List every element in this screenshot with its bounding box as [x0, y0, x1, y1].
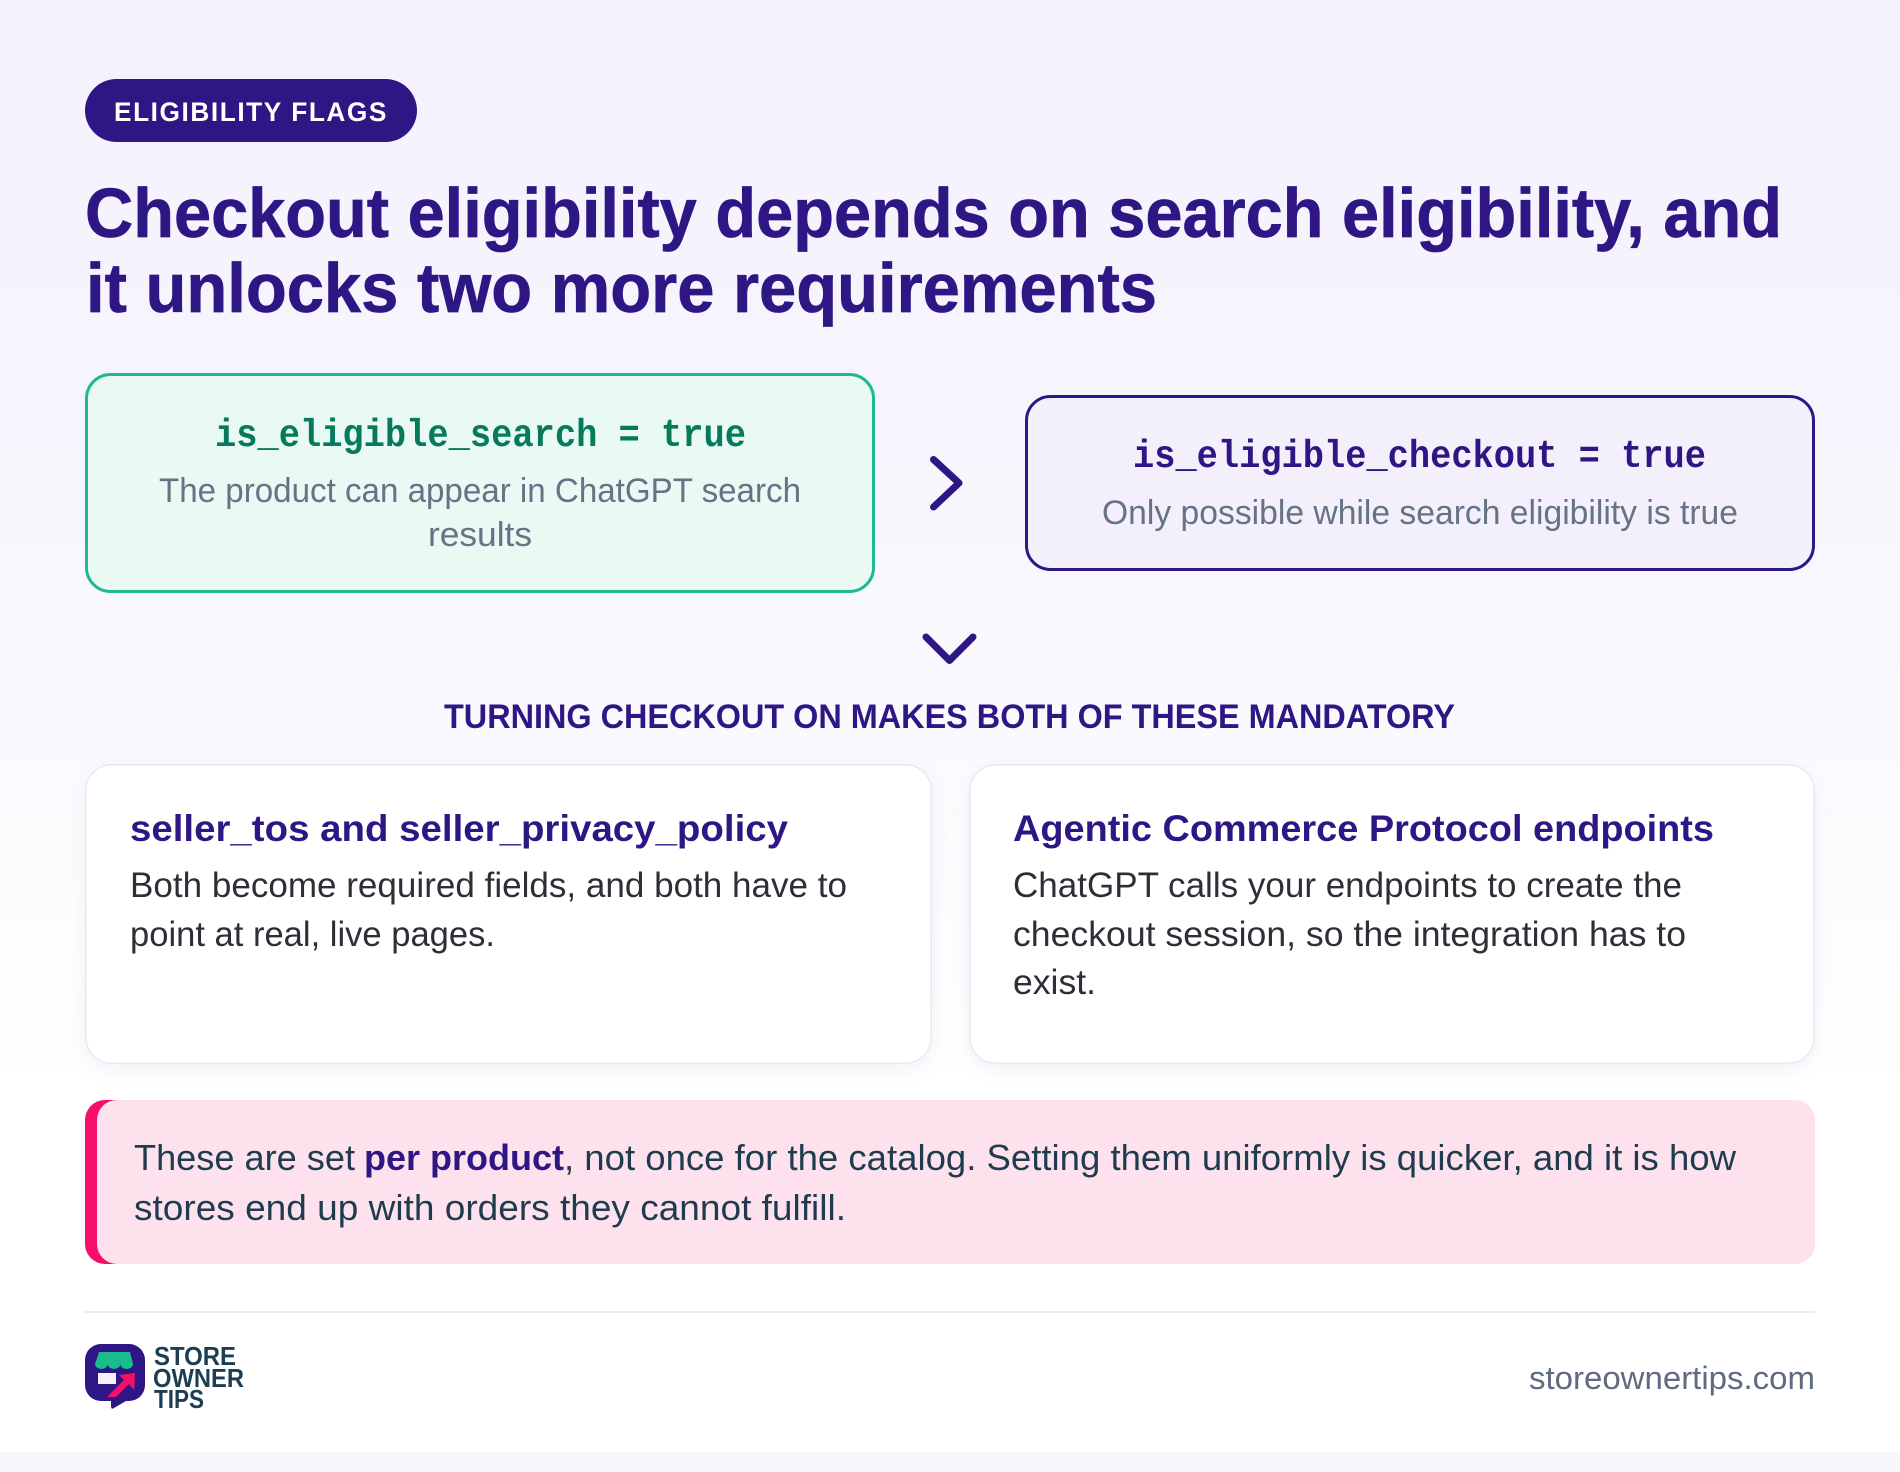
card text: seller fields: [130, 866, 847, 954]
badge: eligibility flags: [85, 79, 417, 142]
panel: seller fields card: [86, 765, 931, 1063]
description: search eligibility: results: [428, 516, 532, 554]
card text: protocol endpoints: [1013, 866, 1686, 1002]
callout: per product warning: , not once for the catalog. Setting them uniformly is quicker, and it is how: [564, 1137, 1737, 1178]
card text: protocol endpoints: checkout session, so the integration has to: [1013, 915, 1686, 954]
description: search eligibility: The product can appear in ChatGPT search: [159, 472, 801, 510]
code: is_eligible_search: is_eligible_search = true: [215, 414, 746, 458]
panel: checkout eligibility flag: [1026, 396, 1814, 570]
icon: store chat bubble: [85, 1344, 145, 1409]
card heading: seller fields: seller_tos and seller_privacy_policy: [130, 808, 788, 849]
wordmark: TIPS: [154, 1384, 204, 1414]
title: [85, 174, 1782, 327]
callout: per product warning: stores end up with orders they cannot fulfill.: [134, 1187, 846, 1228]
arrow: right chevron: [934, 460, 959, 507]
description: search eligibility: [159, 472, 801, 554]
card text: seller fields: Both become required fields, and both have to: [130, 866, 847, 905]
card text: protocol endpoints: ChatGPT calls your endpoints to create the: [1013, 866, 1682, 905]
wordmark: OWNER: [153, 1363, 244, 1393]
title: it unlocks two more requirements: [86, 249, 1157, 327]
description: checkout eligibility: Only possible while search eligibility is true: [1102, 494, 1738, 532]
wordmark: STORE: [154, 1341, 236, 1371]
section heading: TURNING CHECKOUT ON MAKES BOTH OF THESE MANDATORY: [444, 698, 1455, 736]
title: Checkout eligibility depends on search eligibility, and: [85, 174, 1782, 252]
card text: seller fields: point at real, live pages.: [130, 915, 495, 954]
callout: per product warning: [85, 1100, 1815, 1264]
logo: store owner tips: [85, 1341, 244, 1414]
callout: per product warning: These are set: [134, 1137, 355, 1178]
badge: eligibility flags: ELIGIBILITY FLAGS: [114, 97, 388, 127]
wordmark: [153, 1341, 244, 1414]
arrow: down chevron: [926, 637, 973, 660]
panel: search eligibility flag: [86, 374, 874, 592]
footer url: storeownertips.com: [1529, 1360, 1815, 1396]
card text: protocol endpoints: exist.: [1013, 963, 1096, 1002]
callout: per product warning: per product: [364, 1137, 564, 1178]
code: is_eligible_checkout: is_eligible_checkout = true: [1133, 435, 1706, 479]
card heading: protocol endpoints: Agentic Commerce Protocol endpoints: [1013, 808, 1714, 849]
panel: protocol endpoints card: [970, 765, 1814, 1063]
